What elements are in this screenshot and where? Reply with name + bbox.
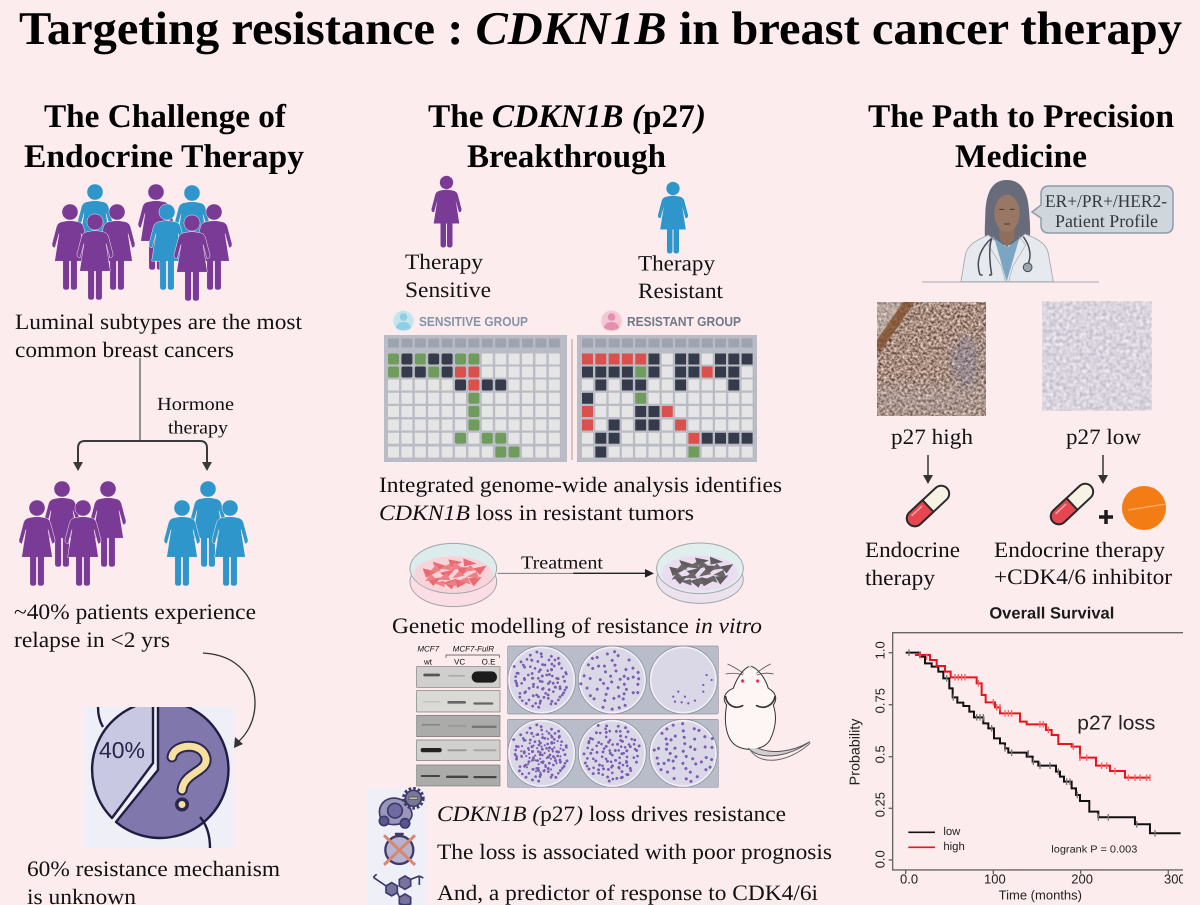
blot panel 2 xyxy=(417,691,500,712)
blot labels: MCF7-FulR xyxy=(453,644,494,653)
arrow: p27 low to therapy xyxy=(1098,455,1108,484)
title: Targeting resistance : CDKN1B in breast cancer therapy xyxy=(19,3,1183,55)
heading: breakthrough: Breakthrough xyxy=(467,139,666,175)
text: relapse: ~40% patients experience xyxy=(14,599,256,624)
text: 60 percent unknown xyxy=(27,856,280,905)
icon: molecule xyxy=(373,874,423,905)
label: therapy resistant: Therapy xyxy=(638,250,715,276)
label: hormone therapy: therapy xyxy=(168,418,229,438)
image: p27 low IHC stain xyxy=(1042,301,1152,411)
heading: breakthrough: The CDKN1B (p27) xyxy=(428,99,706,135)
mask to clip chart at right edge xyxy=(1183,600,1200,905)
legend xyxy=(908,825,965,853)
callout: patient profile xyxy=(1032,186,1173,233)
text: luminal subtypes: common breast cancers xyxy=(15,337,234,362)
label: therapy sensitive: Therapy xyxy=(405,249,483,274)
y axis labels: 0.0 xyxy=(873,850,888,868)
icon: resistant cell dish xyxy=(657,543,743,603)
text: key findings: And, a predictor of response to CDK4/6i xyxy=(437,880,818,905)
x axis labels: 100 xyxy=(984,872,1006,886)
label: p27 loss: p27 loss xyxy=(1077,711,1155,734)
text: relapse: relapse in <2 yrs xyxy=(14,627,170,652)
matrix dark cells xyxy=(401,354,506,390)
arrow: p27 high to therapy xyxy=(923,455,933,484)
blot panel 5 xyxy=(417,765,500,786)
callout: patient profile: Patient Profile xyxy=(1055,211,1158,231)
heading: challenge: Endocrine Therapy xyxy=(24,139,305,175)
blot labels: wt xyxy=(424,658,432,667)
plate tray top xyxy=(508,641,718,718)
icon: clock crossed out xyxy=(384,834,415,865)
x axis labels: 0.0 xyxy=(900,872,918,886)
chart title: Overall Survival xyxy=(989,604,1114,622)
label: therapy sensitive xyxy=(405,249,491,302)
label: endocrine therapy xyxy=(865,537,960,590)
heading: challenge: The Challenge of xyxy=(44,99,287,135)
arrow: curved to pie xyxy=(203,653,255,748)
y axis labels: 0.5 xyxy=(873,745,888,763)
illustration: western blot, zoom coordinates xyxy=(417,644,500,786)
label: combination therapy xyxy=(994,537,1173,589)
icon: blue women, no relapse xyxy=(164,481,248,586)
resistant light rows xyxy=(582,359,753,452)
matrix red cells xyxy=(455,366,479,390)
icon: capsule, endocrine therapy xyxy=(904,482,952,530)
label: p27 high: p27 high xyxy=(891,424,973,449)
icon: sensitive cell dish xyxy=(410,543,497,607)
icons: cell, clock and molecule strip, zoom coordinates xyxy=(367,788,427,905)
blot panel 1 xyxy=(417,667,500,687)
label: treatment: Treatment xyxy=(521,552,603,572)
plate tray bottom xyxy=(508,717,721,789)
blot panel 3 xyxy=(417,715,500,737)
heading: challenge xyxy=(24,99,305,175)
curve: low (black) xyxy=(906,649,1181,837)
text: luminal subtypes: Luminal subtypes are the most xyxy=(15,309,302,334)
x axis labels: 200 xyxy=(1071,872,1093,886)
icon: CDK4/6 inhibitor tablet xyxy=(1122,486,1166,530)
plot frame and ticks xyxy=(889,633,1183,874)
callout: patient profile: ER+/PR+/HER2- xyxy=(1045,191,1167,211)
label: hormone therapy: Hormone xyxy=(157,395,234,415)
icon: group of women, luminal subtypes xyxy=(52,184,232,301)
arrow: hormone therapy branching xyxy=(73,358,212,471)
y axis labels xyxy=(873,641,888,868)
x axis labels: 300 xyxy=(1164,872,1186,886)
resistant green cells xyxy=(635,372,699,452)
blot labels: O.E xyxy=(482,658,495,667)
label: therapy sensitive: Sensitive xyxy=(405,277,491,302)
resistant header cells xyxy=(582,338,753,348)
illustration: treatment dishes, zoom coordinates xyxy=(410,543,743,607)
legend: resistant group xyxy=(601,310,741,332)
resistant red cells xyxy=(582,359,713,438)
legend: sensitive group: SENSITIVE GROUP xyxy=(419,314,528,329)
text: luminal subtypes xyxy=(15,309,302,362)
blot labels: VC xyxy=(454,658,465,667)
label: combination therapy: Endocrine therapy xyxy=(994,537,1165,562)
legend: low xyxy=(943,825,960,838)
text: genome-wide analysis xyxy=(379,472,782,525)
decorative desk line xyxy=(922,281,1099,283)
text: genetic modelling: Genetic modelling of resistance in vitro xyxy=(392,613,762,638)
curve: high (red) xyxy=(915,652,1150,781)
x axis labels xyxy=(900,872,1186,886)
heading: precision medicine: The Path to Precision xyxy=(868,99,1174,135)
label: endocrine therapy: therapy xyxy=(865,565,935,590)
label: combination therapy: +CDK4/6 inhibitor xyxy=(994,564,1173,589)
image: p27 high IHC stain xyxy=(877,302,986,416)
chart: pie 40 percent with question mark: 40% xyxy=(99,737,145,763)
y axis labels: 0.75 xyxy=(873,688,888,713)
legend: resistant group: RESISTANT GROUP xyxy=(627,314,741,329)
matrix light rows xyxy=(388,359,560,452)
x axis title: Time (months) xyxy=(999,888,1082,902)
blot labels xyxy=(417,644,495,667)
panel: the challenge of endocrine therapy xyxy=(14,99,305,905)
chart: Kaplan-Meier overall survival, zoom coordinates xyxy=(847,604,1186,902)
text: key findings xyxy=(437,801,832,905)
heading: precision medicine: Medicine xyxy=(955,139,1087,175)
label: hormone therapy xyxy=(157,395,234,438)
text: relapse xyxy=(14,599,256,652)
matrix green cells xyxy=(388,354,520,458)
icon: therapy sensitive woman xyxy=(431,176,462,248)
y axis labels: 0.25 xyxy=(873,792,888,817)
icon: mouse, zoom coordinates xyxy=(724,664,810,760)
divider between matrices xyxy=(571,339,573,460)
y axis labels: 1.0 xyxy=(873,641,888,659)
icon: cell with gear xyxy=(379,788,423,828)
legend: high xyxy=(943,840,965,853)
chart: resistant group mutation matrix xyxy=(577,335,757,462)
chart: sensitive group mutation matrix xyxy=(384,335,567,462)
matrix header cells xyxy=(388,338,560,348)
label: therapy resistant xyxy=(638,250,723,303)
text: genome-wide analysis: Integrated genome-wide analysis identifies xyxy=(379,472,782,497)
panel: the path to precision medicine xyxy=(847,99,1200,905)
label: therapy resistant: Resistant xyxy=(638,278,723,303)
legend: sensitive group xyxy=(393,310,528,332)
blot panel 4 xyxy=(417,740,500,761)
heading: breakthrough xyxy=(428,99,706,175)
illustration: colony formation plates, zoom coordinates xyxy=(508,641,721,789)
label: p27 low: p27 low xyxy=(1066,424,1141,449)
y axis title: Probability xyxy=(847,718,863,785)
blot labels: MCF7 xyxy=(417,644,440,653)
icon: capsule, combination therapy xyxy=(1048,480,1096,528)
icon: plus sign xyxy=(1099,510,1113,524)
heading: precision medicine xyxy=(868,99,1174,175)
icon: therapy resistant woman xyxy=(658,182,688,254)
text: genome-wide analysis: CDKN1B loss in resistant tumors xyxy=(379,500,694,525)
panel: the CDKN1B p27 breakthrough xyxy=(367,99,832,905)
arrow: treatment xyxy=(498,569,654,578)
label: endocrine therapy: Endocrine xyxy=(865,537,960,562)
chart: pie 40 percent with question mark xyxy=(84,701,234,848)
text: key findings: CDKN1B ( p27) loss drives resistance xyxy=(437,801,786,826)
label: logrank p value: logrank P = 0.003 xyxy=(1051,844,1137,855)
illustration: doctor, zoom coordinates xyxy=(961,180,1053,282)
text: key findings: The loss is associated with poor prognosis xyxy=(437,839,832,864)
text: 60 percent unknown: 60% resistance mechanism xyxy=(27,856,280,881)
icon: purple women, relapse xyxy=(19,481,126,586)
resistant dark cells xyxy=(582,359,753,452)
